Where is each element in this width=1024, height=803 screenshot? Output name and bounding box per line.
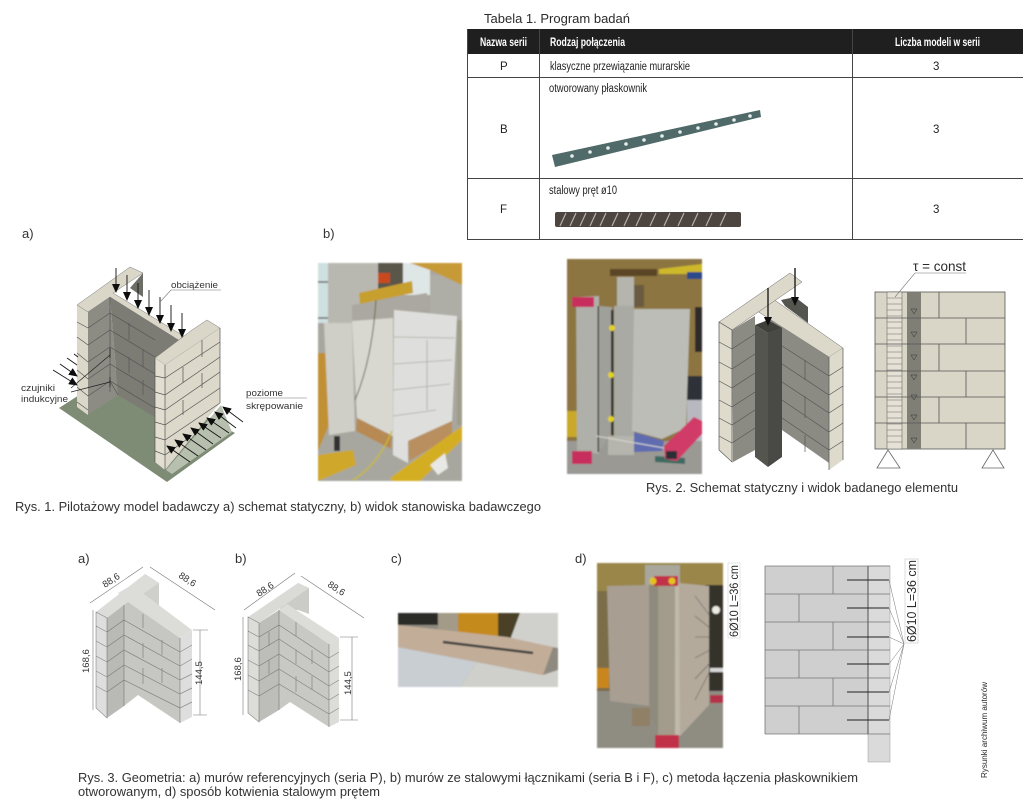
table header: Liczba modeli w serii [895, 37, 980, 49]
dimensions wall b: 88,6 [255, 580, 276, 600]
row P [500, 61, 939, 73]
dimensions wall b [233, 573, 364, 720]
steel rods [847, 580, 889, 720]
annotation: inductive sensors: czujniki [21, 383, 55, 394]
row B: otworowany płaskownik [549, 83, 647, 95]
diagram: static scheme elevation [875, 258, 1005, 468]
dimensions wall b: 88,6 [325, 579, 347, 599]
diagram: wall with steel connectors series B and F [248, 583, 339, 727]
diagram: pilot model static scheme [53, 267, 243, 482]
table header: Nazwa serii [480, 37, 527, 49]
table grid [467, 29, 1023, 240]
row B: 3 [933, 124, 939, 136]
table header [467, 29, 1023, 54]
dimensions wall a: 88,6 [176, 570, 198, 590]
dark column band [907, 292, 921, 449]
arrows: load on column [768, 268, 795, 325]
annotation: load: obciążenie [171, 280, 218, 291]
hatched zone [887, 292, 902, 449]
concrete column [755, 320, 782, 467]
row B [500, 83, 939, 167]
dimensions wall b: 168,6 [233, 657, 244, 681]
annotation: horizontal restraint: skrępowanie [246, 401, 303, 412]
photo: flat bar connection method [398, 613, 558, 687]
caption figure 3: otworowanym, d) sposób kotwienia stalowym prętem [78, 785, 380, 799]
caption figure 2: Rys. 2. Schemat statyczny i widok badanego elementu [646, 481, 958, 495]
row F: stalowy pręt ø10 [549, 185, 617, 197]
annotation: horizontal restraint: poziome [246, 388, 283, 399]
label: rods on photo: 6Ø10 L=36 cm [727, 565, 741, 637]
label a) figure 1: a) [22, 226, 34, 241]
label b) figure 1: b) [323, 226, 335, 241]
shear annotation [895, 258, 966, 297]
icon: perforated flat bar [552, 110, 761, 167]
shear annotation: τ = const [913, 258, 966, 274]
diagram: isometric tested element [719, 268, 843, 470]
label d) figure 3: d) [575, 551, 587, 566]
row F: 3 [933, 204, 939, 216]
caption figure 3: Rys. 3. Geometria: a) murów referencyjnych (seria P), b) murów ze stalowymi łącznikami (seria B i F), c) metoda łączenia płaskownikiem [78, 771, 858, 785]
caption figure 3 [78, 771, 858, 799]
arrows: left restraint [53, 354, 78, 385]
row F [500, 185, 939, 227]
dimensions wall a [81, 567, 215, 715]
label b) figure 3: b) [235, 551, 247, 566]
arrows: horizontal restraint [167, 407, 243, 462]
caption figure 1: Rys. 1. Pilotażowy model badawczy a) schemat statyczny, b) widok stanowiska badawczego [15, 500, 541, 514]
label: rods on elevation: 6Ø10 L=36 cm [904, 560, 919, 642]
diagram: rod anchoring elevation [765, 559, 919, 762]
image credit: Rysunki archiwum autorów [980, 682, 989, 778]
photo: test stand view [318, 263, 462, 481]
dimensions wall a: 144,5 [194, 661, 205, 685]
table header: Rodzaj połączenia [550, 37, 625, 49]
supports [877, 450, 1004, 468]
inductive sensors [71, 348, 110, 392]
table title: Tabela 1. Program badań [484, 11, 630, 26]
masonry walls [77, 267, 220, 470]
dimensions wall a: 168,6 [81, 649, 92, 673]
row P: klasyczne przewiązanie murarskie [550, 61, 690, 73]
arrows: vertical load [116, 268, 182, 337]
table: research programme [467, 29, 1023, 240]
row B: B [500, 124, 508, 136]
row F: F [500, 204, 507, 216]
annotation: load [160, 280, 221, 302]
row P: 3 [933, 61, 939, 73]
diagram: reference wall series P [96, 574, 192, 723]
wall elevation [765, 566, 890, 762]
icon: steel rebar [555, 212, 741, 227]
label c) figure 3: c) [391, 551, 402, 566]
ground slab [59, 370, 235, 482]
label a) figure 3: a) [78, 551, 90, 566]
dimensions wall a: 88,6 [101, 571, 122, 591]
photo: steel rod anchoring [597, 563, 723, 748]
annotation: inductive sensors: indukcyjne [21, 394, 68, 405]
dimensions wall b: 144,5 [343, 671, 354, 695]
photo: tested element [567, 259, 702, 474]
annotation: inductive sensors [21, 383, 68, 405]
row P: P [500, 61, 508, 73]
annotation: horizontal restraint [246, 388, 307, 412]
leader lines [889, 580, 904, 720]
